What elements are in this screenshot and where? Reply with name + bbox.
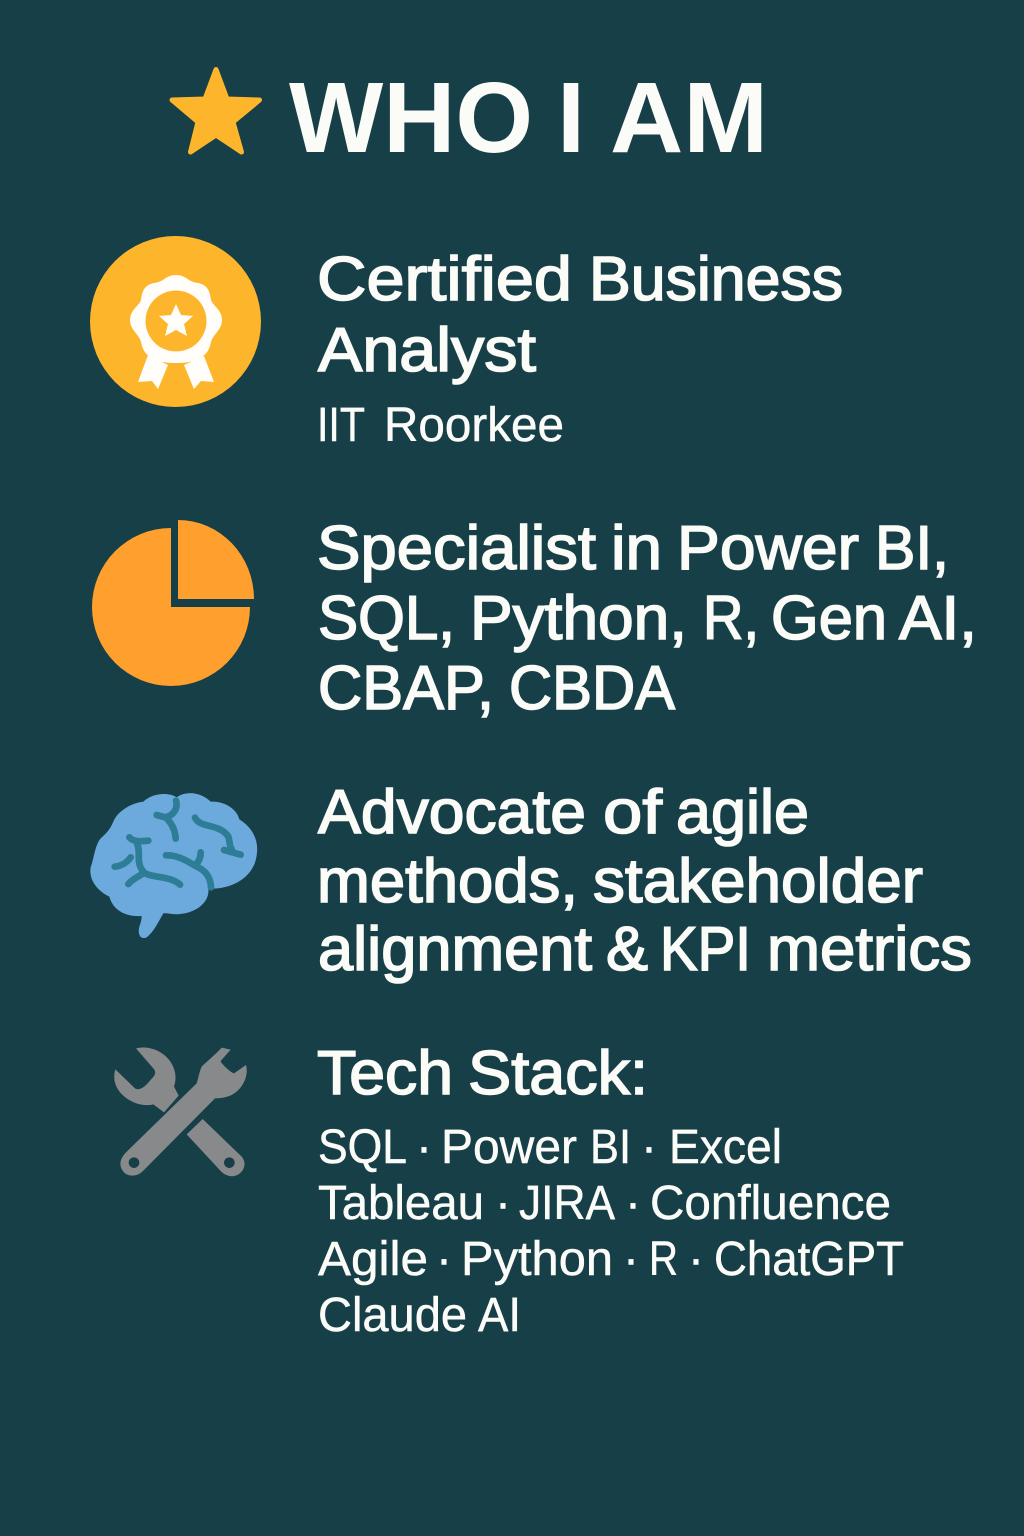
- heading: specialist skills: BI,: [875, 514, 949, 583]
- heading: specialist skills: AI,: [899, 584, 977, 653]
- text: institute: IIT: [317, 399, 365, 452]
- heading: agile methods: stakeholder: [593, 847, 923, 916]
- icon: brain: [90, 793, 257, 938]
- icon: crossed wrenches: [114, 1047, 247, 1176]
- icon: title star: [172, 70, 260, 152]
- heading: specialist skills: SQL,: [318, 584, 455, 653]
- heading: tech stack: Stack:: [468, 1039, 648, 1108]
- text: tools list: ·: [688, 1233, 704, 1286]
- title: AM: [610, 62, 768, 174]
- text: tools list: ChatGPT: [714, 1233, 904, 1286]
- icon: award badge: [90, 236, 261, 407]
- text: tools list: BI: [590, 1121, 631, 1174]
- text: tools list: Confluence: [650, 1177, 891, 1230]
- heading: certified business analyst: Business: [589, 245, 843, 314]
- heading: specialist skills: in: [611, 514, 662, 583]
- text: institute: Roorkee: [384, 399, 564, 452]
- heading: specialist skills: Specialist: [317, 514, 596, 583]
- text: tools list: Power: [441, 1121, 577, 1174]
- text: tools list: Claude: [318, 1289, 467, 1342]
- heading: tech stack: Tech: [317, 1039, 453, 1108]
- heading: specialist skills: Power: [677, 514, 859, 583]
- icon: pie chart: [92, 520, 254, 686]
- heading: agile methods: alignment: [318, 915, 592, 984]
- heading: agile methods: [317, 778, 972, 984]
- heading: agile methods: methods,: [317, 847, 578, 916]
- text: tools list: JIRA: [519, 1177, 615, 1230]
- text: tools list: ·: [625, 1177, 641, 1230]
- title: WHO: [289, 62, 533, 174]
- heading: certified business analyst: [317, 245, 843, 385]
- heading: specialist skills: Python,: [470, 584, 687, 653]
- panel: advocate: [90, 778, 972, 984]
- heading: agile methods: of: [603, 778, 663, 847]
- text: tools list: Excel: [669, 1121, 782, 1174]
- panel: specialist: [92, 514, 977, 723]
- text: tools list: ·: [495, 1177, 511, 1230]
- panel: certification: [90, 236, 843, 452]
- text: tools list: ·: [416, 1121, 432, 1174]
- title: I: [557, 62, 585, 174]
- text: tools list: SQL: [318, 1121, 407, 1174]
- text: tools list: ·: [436, 1233, 452, 1286]
- heading: certified business analyst: Analyst: [318, 316, 536, 385]
- heading: specialist skills: Gen: [771, 584, 887, 653]
- heading: specialist skills: CBAP,: [318, 654, 494, 723]
- text: tools list: Tableau: [318, 1177, 484, 1230]
- heading: tech stack: [317, 1039, 648, 1108]
- heading: agile methods: KPI: [660, 915, 751, 984]
- title: [289, 62, 768, 174]
- heading: agile methods: agile: [676, 778, 809, 847]
- panel: tech stack: [114, 1039, 904, 1342]
- text: tools list: R: [649, 1233, 678, 1286]
- heading: specialist skills: CBDA: [509, 654, 676, 723]
- heading: agile methods: metrics: [767, 915, 972, 984]
- heading: certified business analyst: Certified: [317, 245, 572, 314]
- heading: specialist skills: R,: [703, 584, 759, 653]
- text: tools list: [318, 1121, 904, 1342]
- text: tools list: AI: [478, 1289, 521, 1342]
- heading: agile methods: Advocate: [318, 778, 586, 847]
- text: tools list: Python: [461, 1233, 613, 1286]
- text: tools list: ·: [623, 1233, 639, 1286]
- text: tools list: Agile: [318, 1233, 428, 1286]
- text: tools list: ·: [641, 1121, 657, 1174]
- heading: agile methods: &: [606, 915, 648, 984]
- heading: specialist skills: [317, 514, 977, 723]
